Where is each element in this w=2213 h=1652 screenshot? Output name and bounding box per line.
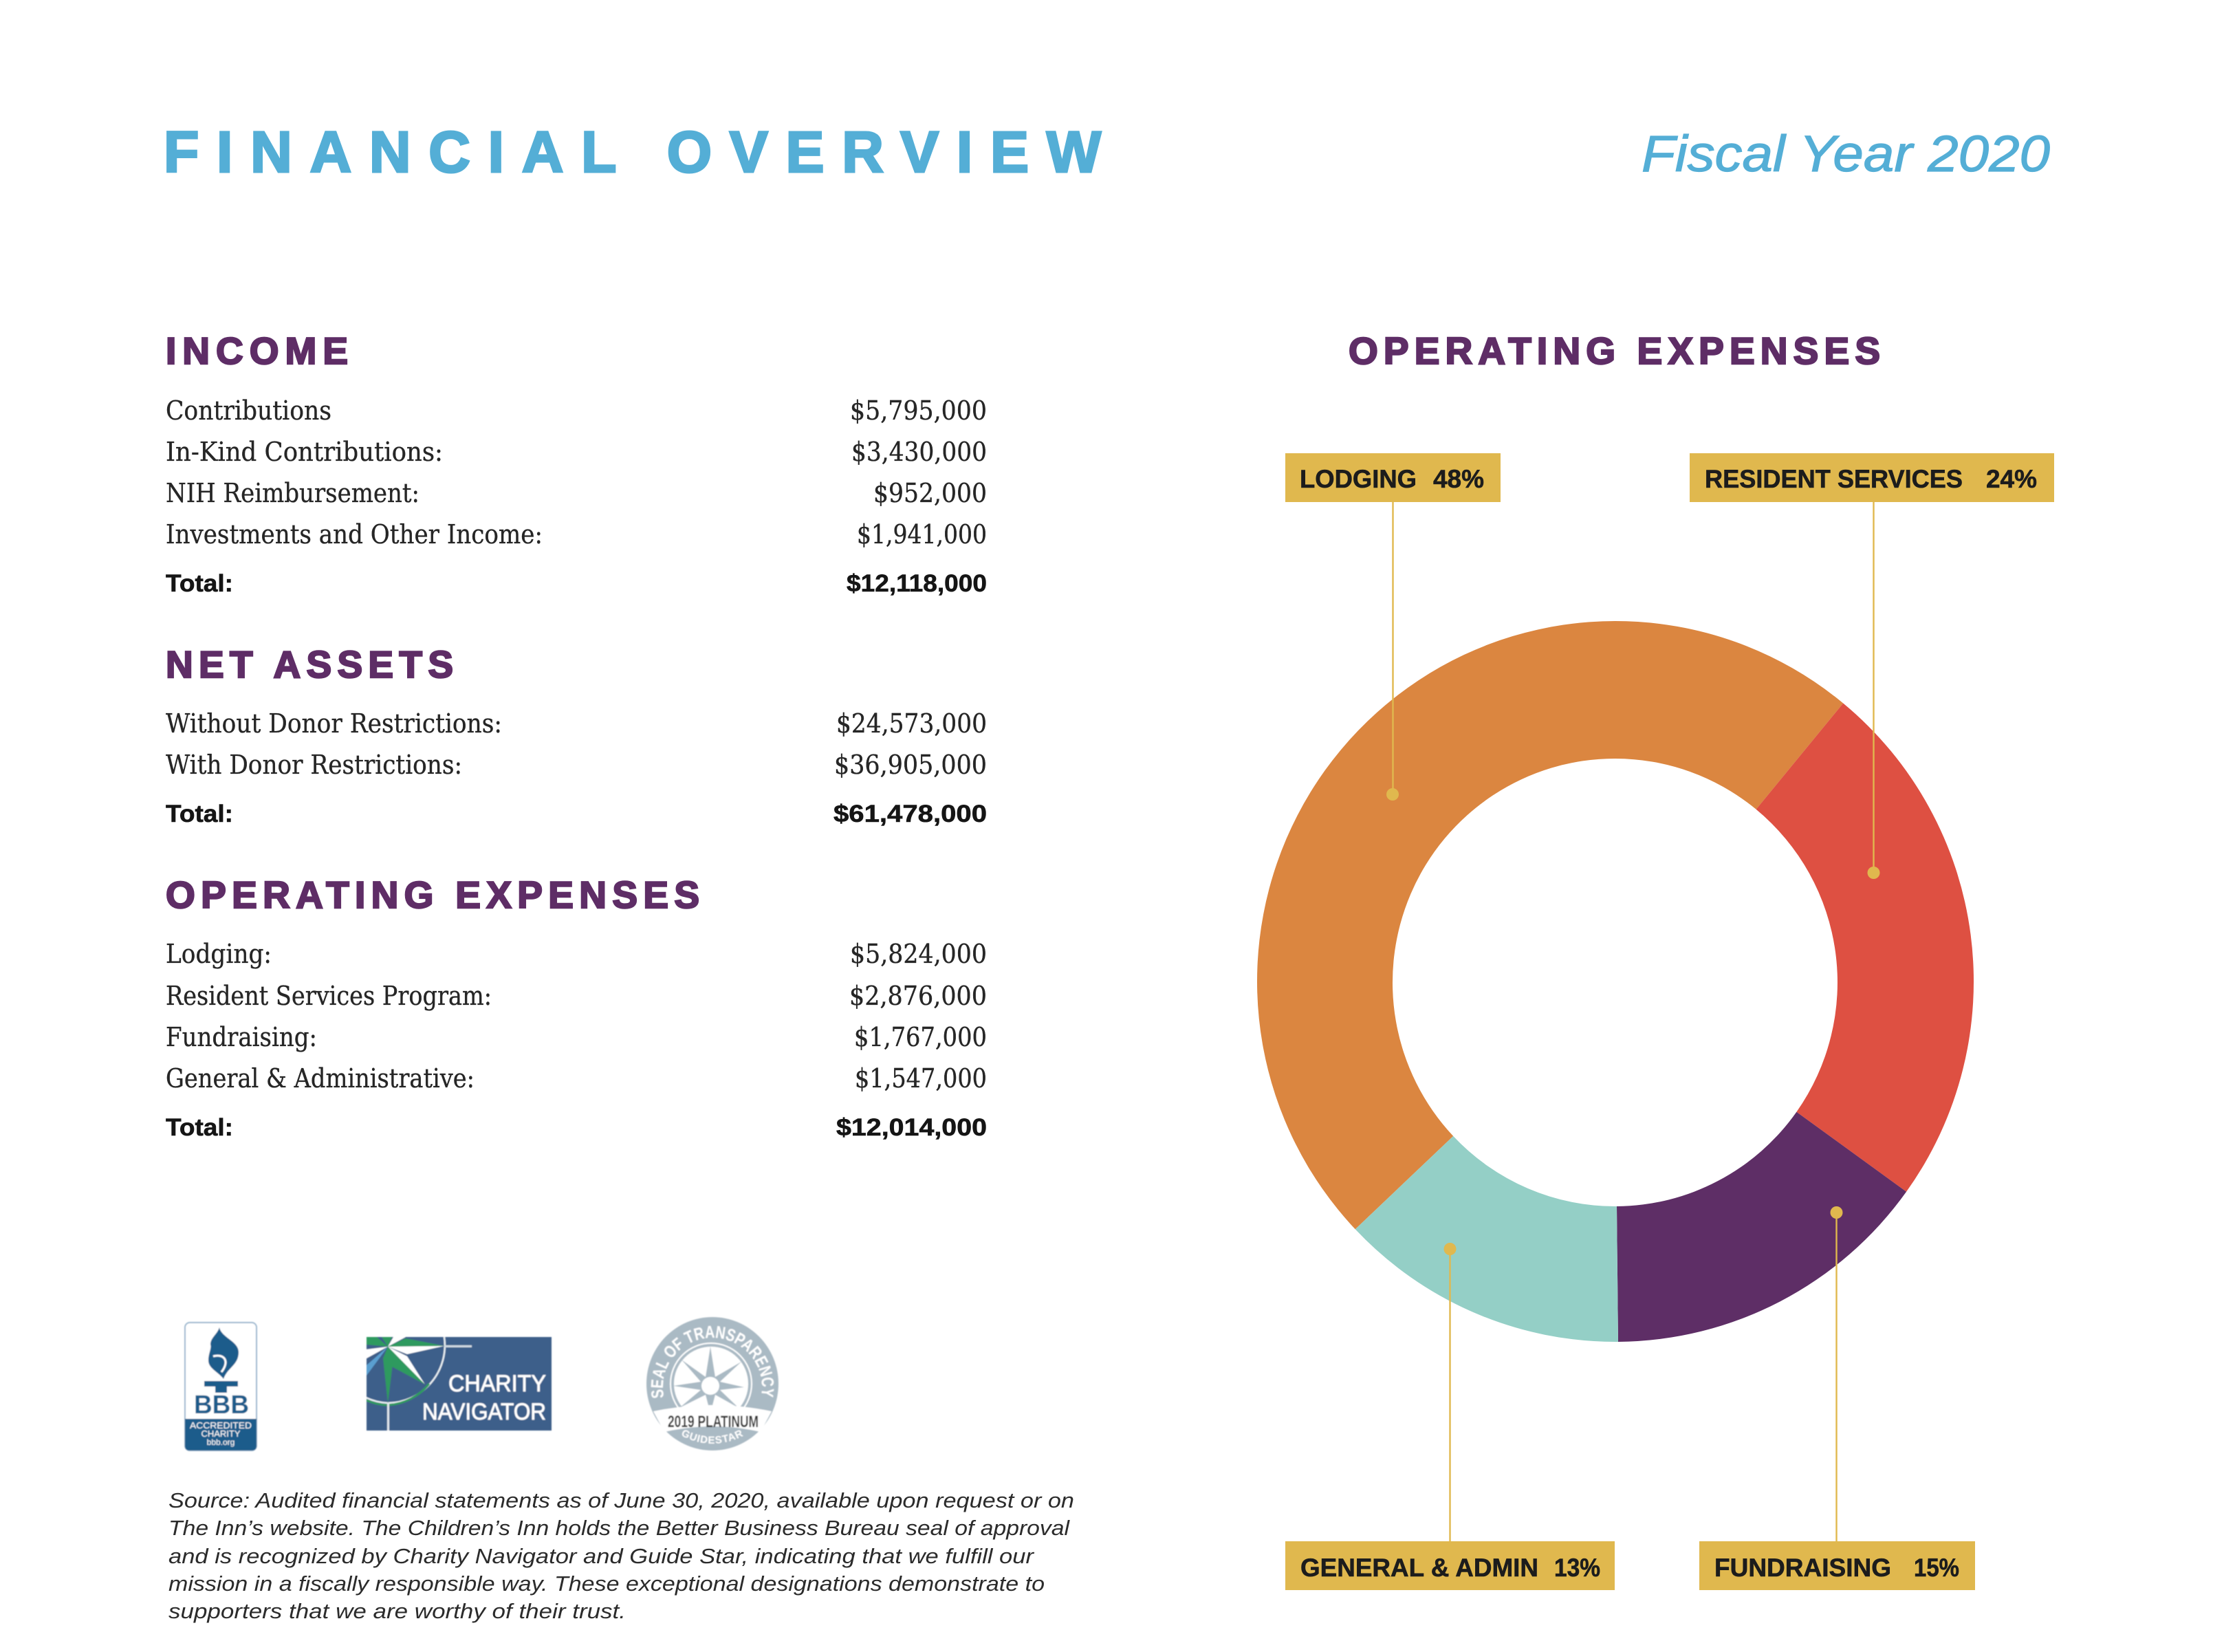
icon: BBB accredited charity seal xyxy=(185,1323,257,1450)
row: without donor restrictions xyxy=(166,708,987,739)
row: income total: $12,118,000 xyxy=(847,570,987,597)
panel: income xyxy=(166,329,987,597)
row: NIH reimbursement: NIH Reimbursement: xyxy=(166,478,419,508)
row: NIH reimbursement xyxy=(166,478,987,508)
row: with donor restrictions: With Donor Restrictions: xyxy=(166,750,462,780)
callout: resident services 24%: 24% xyxy=(1986,465,2037,493)
row: without donor restrictions: Without Donor Restrictions: xyxy=(166,708,502,739)
row: NIH reimbursement: $952,000 xyxy=(873,478,987,508)
row: expenses total xyxy=(166,1114,987,1141)
icon: Charity Navigator logo xyxy=(358,1337,552,1431)
icon: GuideStar seal of transparency xyxy=(646,1316,779,1451)
row: resident services xyxy=(166,981,987,1011)
row: fundraising xyxy=(166,1022,987,1052)
row: fundraising: $1,767,000 xyxy=(854,1022,987,1052)
callout: lodging 48%: LODGING xyxy=(1300,465,1417,493)
row: resident services: Resident Services Program: xyxy=(166,981,492,1011)
callout: lodging 48% xyxy=(1285,453,1501,801)
source note: mission in a fiscally responsible way. These exceptional designations demonstrate to xyxy=(168,1572,1045,1596)
callout: fundraising 15% xyxy=(1699,1206,1975,1590)
fiscal year subtitle: Fiscal Year 2020 xyxy=(1642,125,2050,182)
row: expenses total: $12,014,000 xyxy=(836,1114,987,1141)
row: net assets total: Total: xyxy=(166,801,233,827)
row: income total: Total: xyxy=(166,570,233,597)
icon: BBB accredited charity seal: ACCREDITED xyxy=(190,1420,252,1431)
row: general and administrative xyxy=(166,1063,987,1094)
callout: lodging 48%: 48% xyxy=(1433,465,1484,493)
row: in-kind contributions: $3,430,000 xyxy=(851,437,987,467)
callout: fundraising 15%: 15% xyxy=(1914,1554,1959,1582)
panel: operating expenses table xyxy=(166,873,987,1141)
callout: resident services 24% xyxy=(1690,453,2054,879)
row: contributions: $5,795,000 xyxy=(850,395,987,426)
row: income total xyxy=(166,570,987,597)
slice: fundraising 15% xyxy=(1617,1112,1906,1342)
icon: BBB accredited charity seal: bbb.org xyxy=(207,1437,235,1447)
row: without donor restrictions: $24,573,000 xyxy=(836,708,987,739)
row: in-kind contributions: In-Kind Contributions: xyxy=(166,437,443,467)
icon: Charity Navigator logo: NAVIGATOR xyxy=(422,1399,546,1425)
icon: GuideStar seal of transparency: GUIDESTAR xyxy=(682,1429,744,1444)
icon: Charity Navigator logo: CHARITY xyxy=(448,1371,546,1397)
donut chart: operating expenses xyxy=(1257,621,1974,1342)
row: lodging: $5,824,000 xyxy=(850,939,987,969)
icon: GuideStar seal of transparency: 2019 PLATINUM xyxy=(668,1413,759,1431)
row: with donor restrictions: $36,905,000 xyxy=(834,750,987,780)
heading: operating expenses: OPERATING EXPENSES xyxy=(166,873,699,916)
source note: Source: Audited financial statements as of June 30, 2020, available upon request or on xyxy=(168,1488,1074,1512)
callout: general and admin 13%: GENERAL & ADMIN xyxy=(1300,1554,1538,1582)
callout: resident services 24%: RESIDENT SERVICES xyxy=(1705,465,1963,493)
source note: and is recognized by Charity Navigator and Guide Star, indicating that we fulfill our xyxy=(168,1544,1035,1568)
row: with donor restrictions xyxy=(166,750,987,780)
row: in-kind contributions xyxy=(166,437,987,467)
row: investments: Investments and Other Income: xyxy=(166,519,543,550)
row: lodging xyxy=(166,939,987,969)
title: FINANCIAL OVERVIEW xyxy=(164,120,1102,184)
panel: net assets xyxy=(166,643,987,827)
row: expenses total: Total: xyxy=(166,1114,233,1141)
slice: resident services 24% xyxy=(1756,703,1974,1192)
callout: general and admin 13% xyxy=(1285,1243,1615,1590)
source note: supporters that we are worthy of their trust. xyxy=(168,1599,626,1623)
row: contributions xyxy=(166,395,987,426)
source note: The Inn’s website. The Children’s Inn holds the Better Business Bureau seal of approval xyxy=(168,1516,1070,1540)
callout: fundraising 15%: FUNDRAISING xyxy=(1714,1554,1891,1582)
slice: lodging 48% xyxy=(1257,621,1843,1229)
row: investments xyxy=(166,519,987,550)
icon: BBB accredited charity seal: BBB xyxy=(194,1391,249,1420)
icon: GuideStar seal of transparency: SEAL OF TRANSPARENCY xyxy=(651,1325,774,1399)
row: general and administrative: General & Administrative: xyxy=(166,1063,475,1094)
heading: income: INCOME xyxy=(166,329,348,372)
row: net assets total xyxy=(166,801,987,827)
slice: general and admin 13% xyxy=(1355,1136,1618,1342)
row: general and administrative: $1,547,000 xyxy=(855,1063,987,1094)
source note xyxy=(168,1488,1074,1623)
row: net assets total: $61,478,000 xyxy=(833,801,987,827)
row: fundraising: Fundraising: xyxy=(166,1022,317,1052)
row: investments: $1,941,000 xyxy=(857,519,987,550)
row: lodging: Lodging: xyxy=(166,939,272,969)
chart heading: operating expenses: OPERATING EXPENSES xyxy=(1349,329,1880,372)
callout: general and admin 13%: 13% xyxy=(1554,1554,1600,1582)
row: resident services: $2,876,000 xyxy=(849,981,987,1011)
icon: BBB accredited charity seal: CHARITY xyxy=(201,1428,241,1439)
heading: net assets: NET ASSETS xyxy=(166,643,453,686)
row: contributions: Contributions xyxy=(166,395,331,426)
